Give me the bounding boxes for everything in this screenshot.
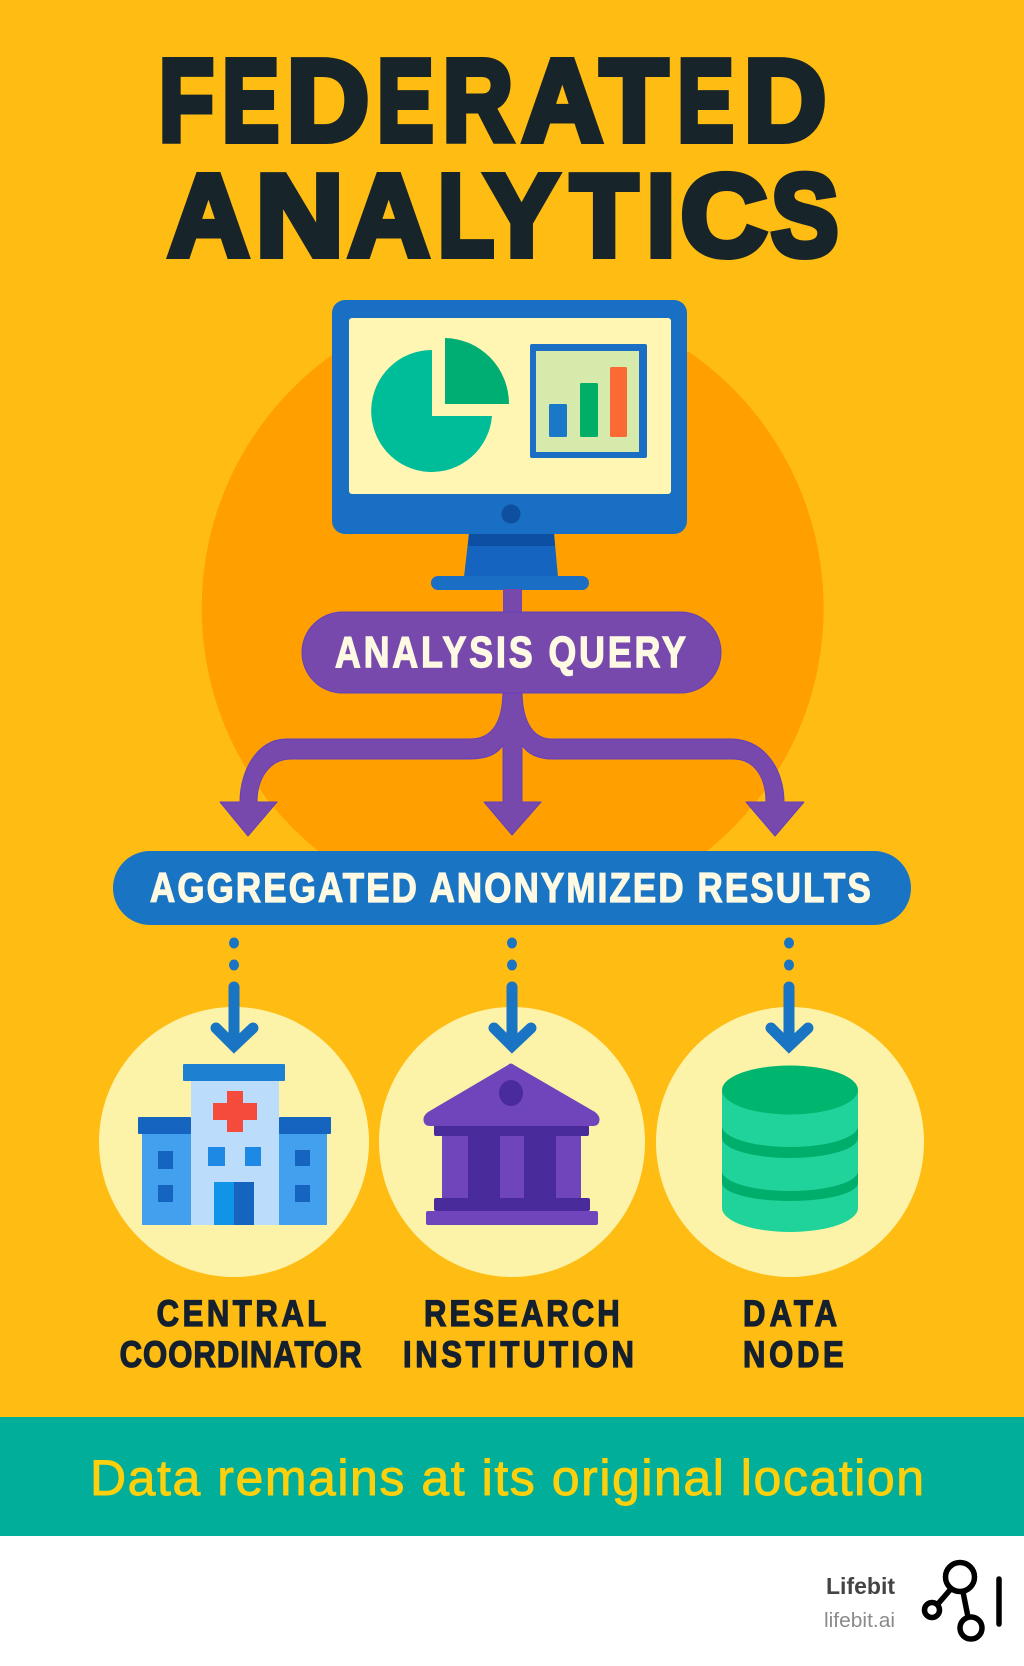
title: D [744, 37, 826, 166]
icon: lifebit logo [924, 1562, 999, 1639]
label: central coordinator: CENTRAL [157, 1294, 326, 1335]
title: C [681, 150, 767, 280]
pill: aggregated anonymized results [113, 851, 911, 925]
title [159, 35, 838, 281]
node circle: research institution [379, 1007, 645, 1277]
monitor stand [431, 533, 589, 590]
pill: aggregated anonymized results: AGGREGATED ANONYMIZED RESULTS [150, 865, 871, 912]
dotted arrow: to research institution [494, 938, 531, 1046]
connector from monitor to query pill [503, 589, 522, 614]
camera dot [502, 504, 520, 524]
title: A [348, 152, 429, 281]
title: F [159, 35, 214, 165]
dotted arrow: to data node [771, 938, 808, 1046]
pill: analysis query [302, 612, 721, 693]
monitor screen [349, 318, 671, 494]
title: S [771, 151, 838, 281]
arrows: query to three branches [220, 690, 804, 836]
label: research institution: RESEARCH [424, 1294, 620, 1335]
label: data node: NODE [743, 1335, 844, 1376]
title: I [647, 151, 675, 281]
icon: hospital [138, 1064, 331, 1225]
background orange circle [202, 352, 824, 919]
monitor body [332, 300, 687, 534]
label: data node: DATA [743, 1294, 837, 1335]
title: Y [485, 151, 559, 281]
bar chart [530, 344, 647, 458]
footer [0, 1536, 1024, 1666]
brand url: lifebit.ai [824, 1610, 895, 1632]
brand name: Lifebit [826, 1573, 895, 1599]
node circle: central coordinator [99, 1007, 369, 1277]
title: L [438, 151, 494, 281]
label: data node [743, 1294, 844, 1376]
icon: computer monitor [332, 300, 687, 590]
icon: institution building [423, 1064, 600, 1225]
title: T [600, 36, 668, 165]
node circle: data node [656, 1007, 924, 1277]
title: E [377, 36, 433, 166]
dotted arrow: to central coordinator [216, 938, 253, 1046]
label: research institution: INSTITUTION [403, 1335, 634, 1376]
title: A [522, 36, 602, 166]
title: N [256, 151, 343, 281]
title: D [287, 37, 369, 166]
title: A [168, 152, 249, 281]
title: T [571, 151, 638, 280]
title: R [443, 35, 513, 165]
banner: data remains [0, 1417, 1024, 1536]
icon: database cylinder [722, 1066, 858, 1232]
banner: data remains: Data remains at its original location [90, 1450, 924, 1506]
pill: analysis query: ANALYSIS QUERY [335, 629, 686, 677]
title: E [678, 36, 734, 166]
label: research institution [403, 1294, 634, 1376]
pie chart [371, 338, 509, 472]
label: central coordinator [120, 1294, 362, 1376]
title: E [222, 36, 279, 166]
label: central coordinator: COORDINATOR [120, 1335, 362, 1376]
